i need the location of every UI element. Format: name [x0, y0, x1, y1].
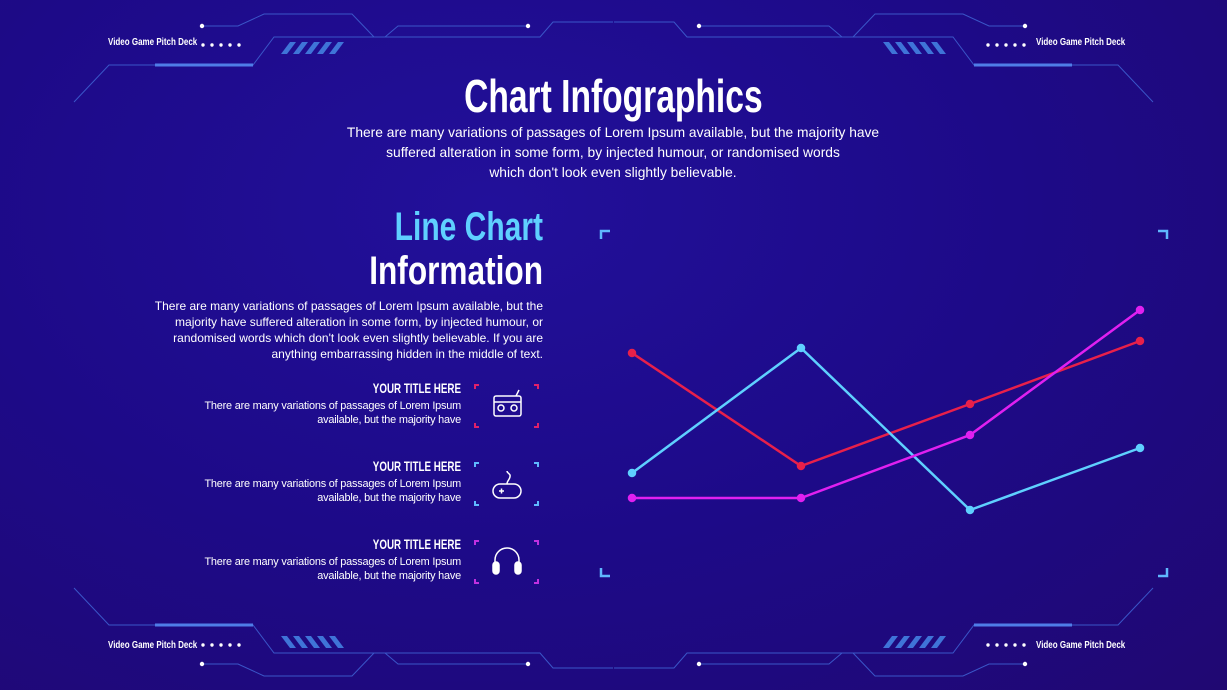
- section heading: Information: [369, 249, 543, 293]
- item 2: available, but the majority have: [317, 492, 461, 504]
- subtitle: There are many variations of passages of Lorem Ipsum available, but the majority have: [347, 125, 879, 140]
- section paragraph: majority have suffered alteration in some form, by injected humour, or: [175, 315, 543, 329]
- section heading: [369, 205, 543, 293]
- title: Chart Infographics: [464, 70, 763, 122]
- item 3: There are many variations of passages of Lorem Ipsum: [204, 556, 461, 568]
- item 1: YOUR TITLE HERE: [373, 380, 461, 396]
- brand label bottom-left: Video Game Pitch Deck: [108, 640, 197, 651]
- icon: headphones: [475, 541, 538, 583]
- series: red: [629, 338, 1143, 469]
- brand label bottom-right: Video Game Pitch Deck: [1036, 640, 1125, 651]
- subtitle: which don't look even slightly believable.: [489, 165, 737, 180]
- series: cyan: [629, 345, 1143, 513]
- item 1: [204, 380, 461, 426]
- section heading: Line Chart: [395, 205, 543, 249]
- item 2: [204, 458, 461, 504]
- brand label top-left: Video Game Pitch Deck: [108, 37, 197, 48]
- item 3: [204, 536, 461, 582]
- brand label top-right: Video Game Pitch Deck: [1036, 37, 1125, 48]
- icon: radio: [475, 385, 538, 427]
- section paragraph: randomised words which don't look even slightly believable. If you are: [173, 331, 543, 345]
- icons: [474, 384, 539, 584]
- series: magenta: [629, 307, 1143, 501]
- item 1: There are many variations of passages of Lorem Ipsum: [204, 400, 461, 412]
- item 2: YOUR TITLE HERE: [373, 458, 461, 474]
- section paragraph: anything embarrassing hidden in the middle of text.: [272, 347, 543, 361]
- item 1: available, but the majority have: [317, 414, 461, 426]
- item 3: YOUR TITLE HERE: [373, 536, 461, 552]
- section paragraph: [155, 299, 543, 361]
- item 2: There are many variations of passages of Lorem Ipsum: [204, 478, 461, 490]
- subtitle: suffered alteration in some form, by injected humour, or randomised words: [386, 145, 840, 160]
- section paragraph: There are many variations of passages of Lorem Ipsum available, but the: [155, 299, 543, 313]
- icon: gamepad: [475, 463, 538, 505]
- subtitle: [347, 125, 879, 180]
- item 3: available, but the majority have: [317, 570, 461, 582]
